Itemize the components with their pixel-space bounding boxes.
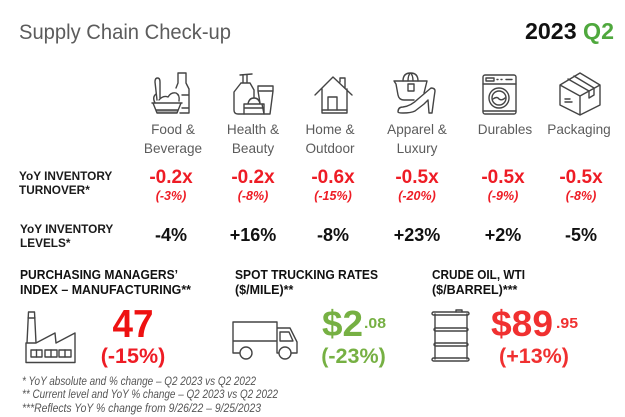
inventory turnover values: -0.5x	[395, 167, 439, 188]
footnotes: * YoY absolute and % change – Q2 2023 vs Q2 2022	[22, 376, 257, 388]
inventory levels values	[155, 225, 597, 245]
inventory turnover values: -0.6x	[311, 167, 355, 188]
icon: truck	[233, 322, 297, 359]
inventory levels values: -5%	[565, 225, 597, 245]
footnotes: ***Reflects YoY % change from 9/26/22 – 9/25/2023	[22, 403, 262, 415]
oil value: .95	[556, 315, 578, 332]
category labels: Apparel &	[387, 122, 447, 137]
inventory turnover values	[149, 167, 603, 203]
inventory turnover values: (-20%)	[398, 189, 436, 203]
period heading: 2023 Q2	[525, 18, 614, 44]
heading: purchasing managers index	[20, 268, 191, 297]
trucking value: $2	[322, 303, 363, 344]
title: Supply Chain Check-up	[19, 21, 231, 44]
category labels: Packaging	[547, 122, 611, 137]
icon: durables	[483, 75, 516, 114]
category labels: Home &	[305, 122, 355, 137]
inventory turnover values: -0.2x	[149, 167, 193, 188]
inventory turnover values: (-15%)	[314, 189, 352, 203]
trucking value: (-23%)	[321, 344, 386, 368]
icon: home and outdoor	[315, 77, 352, 113]
row label: inventory levels: YoY INVENTORY	[20, 222, 113, 236]
category labels: Outdoor	[305, 141, 355, 156]
icon: apparel and luxury	[394, 73, 435, 113]
trucking value: .08	[364, 315, 386, 332]
category labels: Beverage	[144, 141, 202, 156]
row label: inventory turnover: TURNOVER*	[19, 183, 90, 197]
inventory levels values: +2%	[485, 225, 521, 245]
row label: inventory levels	[20, 222, 113, 250]
heading: crude oil: ($/BARREL)***	[432, 283, 518, 297]
inventory turnover values: (-8%)	[238, 189, 268, 203]
row label: inventory turnover	[19, 169, 112, 197]
category labels: Durables	[478, 122, 532, 137]
PMI value	[101, 303, 165, 368]
heading: purchasing managers index: PURCHASING MANAGERS’	[20, 268, 178, 282]
category labels	[144, 122, 611, 156]
inventory turnover values: (-8%)	[566, 189, 596, 203]
oil value: (+13%)	[499, 344, 569, 368]
icon: factory	[26, 312, 75, 362]
icon: packaging	[560, 73, 600, 115]
icon: health and beauty	[234, 74, 273, 114]
heading: crude oil	[432, 268, 525, 297]
footnotes	[22, 376, 279, 415]
heading: purchasing managers index: INDEX – MANUFACTURING**	[20, 283, 191, 297]
heading: spot trucking rates: ($/MILE)**	[235, 283, 293, 297]
PMI value: (-15%)	[101, 344, 165, 368]
row label: inventory levels: LEVELS*	[20, 236, 71, 250]
heading: spot trucking rates: SPOT TRUCKING RATES	[235, 268, 378, 282]
heading: spot trucking rates	[235, 268, 378, 297]
category labels: Health &	[227, 122, 279, 137]
category labels: Food &	[151, 122, 195, 137]
row label: inventory turnover: YoY INVENTORY	[19, 169, 112, 183]
inventory turnover values: -0.2x	[231, 167, 275, 188]
category labels: Luxury	[397, 141, 438, 156]
inventory levels values: -8%	[317, 225, 349, 245]
icon: food and beverage	[152, 73, 189, 113]
inventory levels values: +16%	[230, 225, 276, 245]
PMI value: 47	[112, 303, 154, 346]
inventory turnover values: (-3%)	[156, 189, 186, 203]
heading: crude oil: CRUDE OIL, WTI	[432, 268, 525, 282]
inventory levels values: +23%	[394, 225, 440, 245]
inventory levels values: -4%	[155, 225, 187, 245]
category labels: Beauty	[232, 141, 274, 156]
inventory turnover values: -0.5x	[481, 167, 525, 188]
trucking value	[321, 303, 386, 368]
oil value: $89	[491, 303, 553, 344]
footnotes: ** Current level and YoY % change – Q2 2023 vs Q2 2022	[22, 389, 279, 401]
inventory turnover values: -0.5x	[559, 167, 603, 188]
icon: oil barrel	[432, 310, 469, 361]
inventory turnover values: (-9%)	[488, 189, 518, 203]
oil value	[491, 303, 578, 368]
